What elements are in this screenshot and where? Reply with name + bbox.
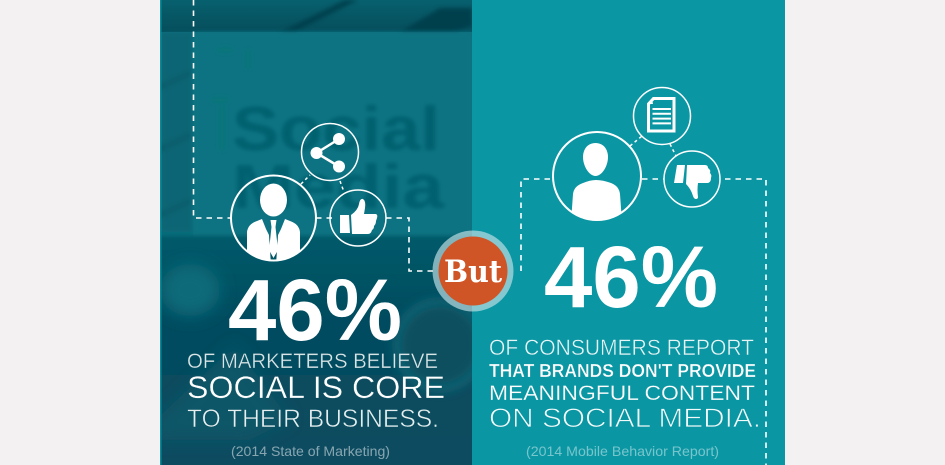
icon group: marketer with share and like (231, 124, 386, 265)
blurred green marks (212, 50, 248, 150)
dashed connector: left (194, 0, 434, 271)
blurred desk bowl (391, 297, 472, 394)
icon: document (634, 88, 690, 144)
dashed connector: right (521, 179, 766, 465)
icon: businessman (231, 176, 316, 265)
panel: consumers (472, 0, 785, 465)
photo background: desk (150, 236, 480, 465)
blurred desk objects (162, 262, 278, 436)
text block: consumers: MEANINGFUL CONTENT (489, 382, 755, 405)
panel: marketers (150, 0, 488, 465)
blurred board word: Social: Social (232, 95, 440, 164)
stat: left 46%: 46% (228, 262, 402, 359)
text block: marketers: TO THEIR BUSINESS. (187, 405, 439, 433)
text block: marketers: SOCIAL IS CORE (187, 369, 445, 405)
source: right: (2014 Mobile Behavior Report) (526, 443, 719, 459)
photo background: board (194, 30, 472, 35)
text block: consumers: ON SOCIAL MEDIA. (489, 403, 761, 433)
text block: consumers: THAT BRANDS DON'T PROVIDE (489, 361, 756, 381)
icon group: consumer with document and dislike (553, 88, 720, 222)
icon: thumbs down (664, 151, 720, 207)
photo background: wall stripes (161, 0, 472, 218)
stat: right 46%: 46% (544, 229, 718, 326)
icon: thumbs up (330, 190, 386, 246)
badge: But (432, 230, 514, 312)
text block: consumers (489, 335, 761, 433)
text block: marketers (187, 350, 445, 433)
connector ticks (630, 136, 676, 156)
badge: But: But (444, 254, 503, 290)
photo background: wall (161, 0, 472, 32)
text block: consumers: OF CONSUMERS REPORT (489, 335, 754, 360)
text block: marketers: OF MARKETERS BELIEVE (187, 350, 438, 373)
connector ticks (301, 175, 344, 192)
icon: person (553, 132, 641, 222)
source: left: (2014 State of Marketing) (231, 443, 390, 459)
blurred board word: Media: Media (232, 153, 445, 222)
icon: share (302, 124, 358, 180)
